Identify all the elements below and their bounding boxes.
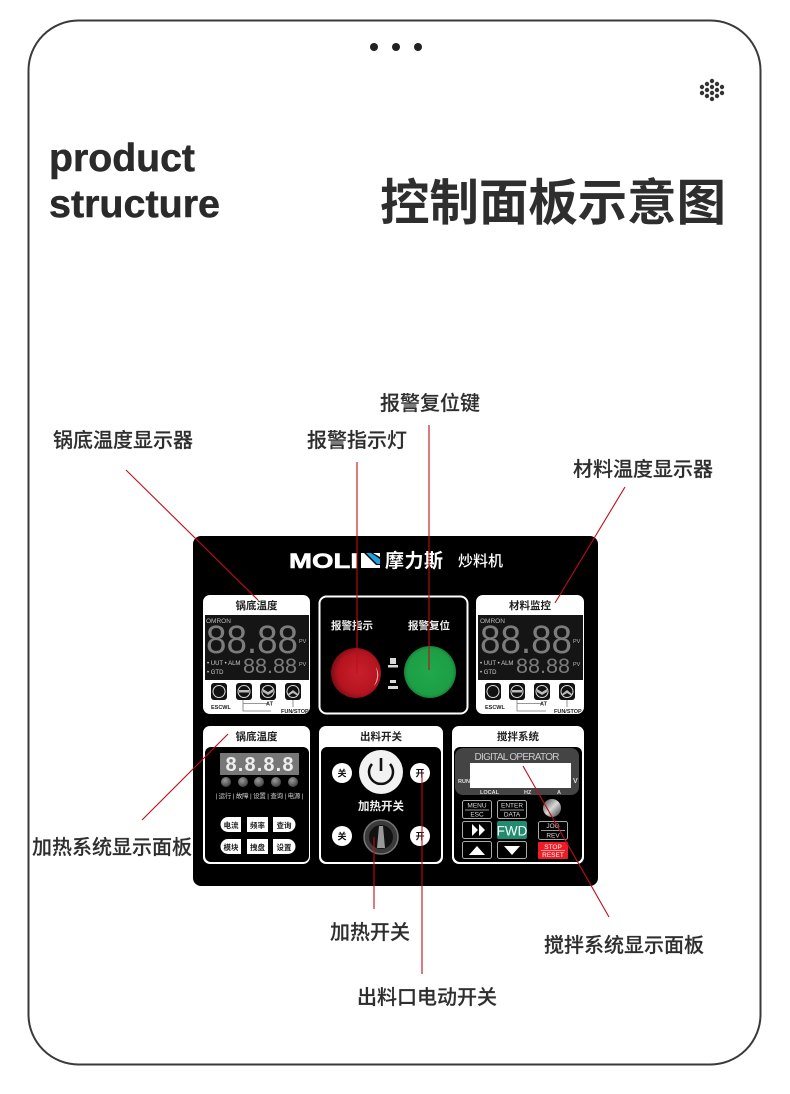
panel title: 锅底温度 xyxy=(236,730,278,743)
temperature readout: PV xyxy=(573,639,581,645)
operator display: LOCAL xyxy=(480,790,500,796)
operator keys: STOP xyxy=(544,844,562,851)
temperature readout: • UUT • ALM xyxy=(207,661,240,667)
temperature readout: PV xyxy=(573,662,581,668)
logo: 炒料机 xyxy=(458,553,503,570)
temperature readout: • GTD xyxy=(480,670,497,676)
function buttons: 拽盘 xyxy=(250,842,265,852)
panel: alarm indicator and reset: 报警复位 xyxy=(408,619,450,632)
panel title: 出料开关 xyxy=(360,730,402,743)
temperature readout xyxy=(478,615,583,680)
logo: 摩力斯 xyxy=(385,549,443,572)
operator keys: REV xyxy=(546,832,560,840)
heading: product structure xyxy=(49,137,220,226)
keypad: AT xyxy=(266,702,274,708)
off and on buttons xyxy=(332,763,430,846)
logo xyxy=(289,549,503,573)
temperature readout: • UUT • ALM xyxy=(480,661,513,667)
operator keys: ENTER xyxy=(501,802,523,810)
label: heating switch: 加热开关 xyxy=(330,921,410,944)
function buttons: 电流 xyxy=(224,820,239,830)
operator keys xyxy=(462,800,568,859)
panel: material monitoring display xyxy=(476,595,584,715)
panel: alarm indicator and reset: 报警指示 xyxy=(331,619,373,632)
keypad: FUN/STOP xyxy=(554,709,582,715)
temperature readout xyxy=(205,615,309,680)
keypad: ESCWL xyxy=(485,705,506,711)
panel title: 材料监控 xyxy=(509,599,551,612)
off and on buttons: 关 xyxy=(337,830,347,842)
operator display: V xyxy=(573,778,578,785)
label: material temperature display: 材料温度显示器 xyxy=(573,458,713,481)
temperature readout: OMRON xyxy=(480,618,505,625)
operator display xyxy=(455,748,579,796)
operator keys: MENU xyxy=(467,802,487,810)
connector marks xyxy=(388,658,398,689)
temperature readout: 88.88 xyxy=(206,618,298,662)
panel: mixing system xyxy=(452,726,584,864)
pointer lines xyxy=(126,425,625,974)
label: alarm indicator lamp: 报警指示灯 xyxy=(307,429,407,452)
panel: discharge switch xyxy=(319,726,443,864)
operator keys: ESC xyxy=(470,812,484,818)
heating switch label: 加热开关 xyxy=(358,799,404,813)
label: mixing system display panel: 搅拌系统显示面板 xyxy=(544,934,704,957)
label: bottom temperature display: 锅底温度显示器 xyxy=(53,429,193,452)
red alarm lamp xyxy=(331,648,381,698)
label: alarm reset key: 报警复位键 xyxy=(380,392,480,415)
operator keys: DATA xyxy=(504,812,521,818)
temperature readout: PV xyxy=(299,639,307,645)
keypad: ESCWL xyxy=(211,705,232,711)
temperature readout: • GTD xyxy=(207,670,224,676)
function buttons: 设置 xyxy=(276,842,292,852)
operator display: DIGITAL OPERATOR xyxy=(474,752,560,763)
icon: speaker grille xyxy=(700,79,724,101)
function buttons: 查询 xyxy=(276,820,292,830)
green reset button xyxy=(404,646,456,698)
temperature readout: 88.88 xyxy=(243,654,297,678)
digital readout: 8.8.8.8 xyxy=(226,754,294,776)
operator keys: JOG xyxy=(546,823,560,830)
panel: bottom temperature display xyxy=(203,595,310,715)
function buttons: 频率 xyxy=(250,820,265,830)
function buttons: 模块 xyxy=(224,842,239,852)
three dots indicator xyxy=(370,43,422,51)
icon: power button xyxy=(359,750,403,794)
label: discharge port electric switch: 出料口电动开关 xyxy=(357,986,497,1009)
keypad xyxy=(211,683,309,715)
panel title: 搅拌系统 xyxy=(497,730,539,743)
function buttons xyxy=(221,817,296,854)
logo: MOLI xyxy=(289,549,358,573)
operator display: A xyxy=(557,790,561,796)
icon: speed knob xyxy=(543,799,561,817)
off and on buttons: 开 xyxy=(415,768,425,778)
heading: product structure: product xyxy=(49,137,195,180)
keypad: AT xyxy=(540,702,548,708)
control panel xyxy=(193,536,598,886)
title: 控制面板示意图 xyxy=(380,176,726,231)
indicator LEDs xyxy=(221,777,298,787)
off and on buttons: 开 xyxy=(415,832,425,842)
temperature readout: 88.88 xyxy=(516,654,570,678)
operator display: RUN xyxy=(458,779,470,785)
operator keys: RESET xyxy=(542,852,564,859)
temperature readout: OMRON xyxy=(206,618,231,625)
keypad: FUN/STOP xyxy=(281,709,309,715)
LED labels: | 运行 | 故障 | 设置 | 查询 | 电源 | xyxy=(216,791,304,800)
panel: alarm indicator and reset xyxy=(320,596,468,714)
operator display: HZ xyxy=(524,790,532,796)
panel: heating system display xyxy=(203,726,310,864)
heading: product structure: structure xyxy=(49,183,220,226)
icon: rotary knob xyxy=(364,820,398,854)
keypad xyxy=(485,683,582,715)
label: heating system display panel: 加热系统显示面板 xyxy=(32,836,192,859)
panel title: 锅底温度 xyxy=(236,599,278,612)
off and on buttons: 关 xyxy=(337,768,347,778)
operator keys: FWD xyxy=(497,824,528,838)
temperature readout: 88.88 xyxy=(480,618,572,662)
temperature readout: PV xyxy=(299,662,307,668)
